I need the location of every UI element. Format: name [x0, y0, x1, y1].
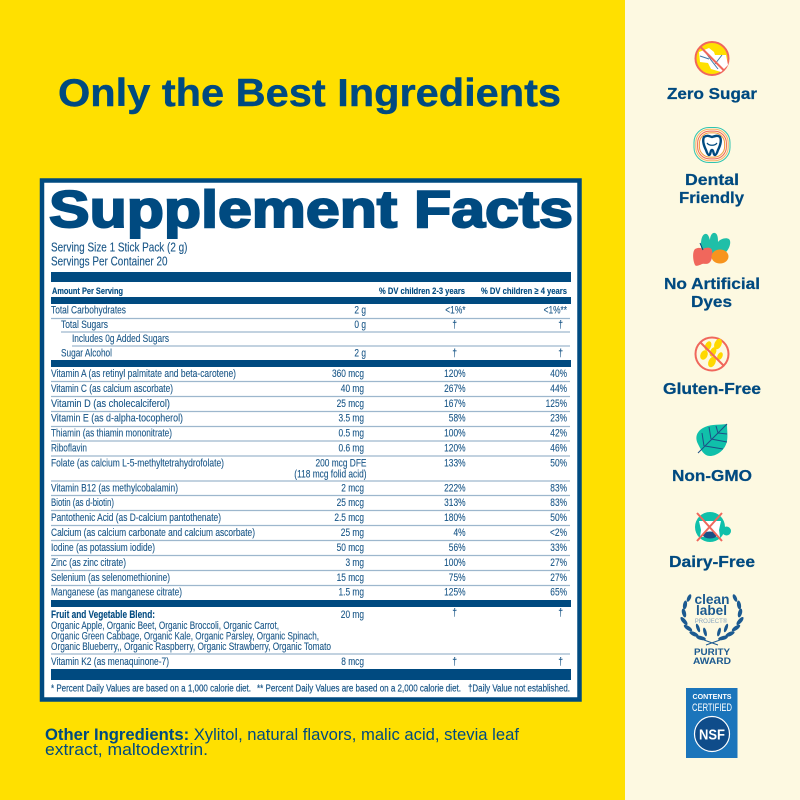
table header: % DV children 2-3 years — [379, 286, 465, 297]
row: Manganese: 125% — [444, 586, 466, 599]
benefit: Gluten-Free: Gluten-Free — [663, 381, 761, 398]
row: Vitamin C: 44% — [550, 383, 567, 395]
row: Folate: 200 mcg DFE — [315, 457, 367, 470]
row: Iodine — [51, 542, 567, 554]
row: Zinc: 100% — [444, 557, 466, 569]
serving information: Servings Per Container 20 — [51, 254, 168, 268]
benefit: Non-GMO: Non-GMO — [672, 468, 752, 485]
icon: crossed-out cow — [695, 512, 731, 542]
footnotes — [51, 684, 570, 694]
badge: Clean Label Project Purity Award: PURITY — [694, 647, 731, 658]
row: Riboflavin: 46% — [550, 442, 567, 455]
row: Riboflavin: 120% — [444, 442, 466, 455]
row: Biotin: 83% — [550, 497, 567, 509]
row: Vitamin B12 — [51, 482, 567, 495]
row: Pantothenic Acid — [51, 512, 567, 524]
row: Zinc: 3 mg — [345, 557, 364, 569]
row: Selenium: 75% — [449, 572, 466, 584]
benefit: Gluten-Free — [663, 338, 761, 398]
row: Manganese: Manganese (as manganese citrate) — [51, 586, 182, 598]
footnotes: * Percent Daily Values are based on a 1,000 calorie diet. — [51, 684, 251, 694]
row: Vitamin A: 360 mcg — [332, 368, 364, 380]
row: Vitamin C: 267% — [444, 383, 466, 395]
row: Vitamin K2 — [51, 656, 563, 668]
row: Includes 0g Added Sugars: Includes 0g Added Sugars — [72, 333, 169, 345]
row: Vitamin K2: † — [452, 656, 457, 668]
row: Pantothenic Acid: 50% — [550, 512, 567, 524]
row: Riboflavin: Riboflavin — [51, 442, 87, 454]
badge: NSF Contents Certified: CERTIFIED — [692, 702, 732, 714]
row: Vitamin C: 40 mg — [341, 383, 364, 395]
row: Vitamin K2: Vitamin K2 (as menaquinone-7) — [51, 656, 169, 668]
row: Manganese — [51, 586, 567, 599]
row: Vitamin E: 3.5 mg — [338, 412, 364, 425]
row: Fruit and Vegetable Blend: † — [452, 607, 457, 619]
benefit: Zero Sugar — [667, 42, 757, 103]
benefit: No Artificial Dyes: Dyes — [691, 294, 732, 311]
row: Folate: 133% — [444, 457, 466, 470]
row: Total Sugars: Total Sugars — [61, 319, 108, 331]
row: Vitamin K2: † — [558, 656, 563, 668]
panel: supplement facts — [42, 180, 580, 700]
row: Folate: 50% — [550, 457, 567, 470]
benefit: Dental Friendly: Friendly — [679, 190, 744, 207]
row: Calcium: Calcium (as calcium carbonate and calcium ascorbate) — [51, 527, 255, 539]
row: Selenium: Selenium (as selenomethionine) — [51, 572, 170, 584]
badge: NSF Contents Certified — [686, 688, 738, 758]
table header: % DV children ≥ 4 years — [481, 286, 567, 297]
row: Iodine: 33% — [550, 542, 567, 554]
row: Iodine: 56% — [449, 542, 466, 554]
row: Total Carbohydrates: Total Carbohydrates — [51, 304, 126, 316]
footnotes: †Daily Value not established. — [468, 684, 570, 694]
icon: crossed-out wheat — [696, 338, 728, 370]
icon: leaf — [696, 424, 727, 456]
row: Vitamin C: Vitamin C (as calcium ascorbate) — [51, 383, 173, 395]
benefit: Dairy-Free — [669, 512, 755, 571]
row: Vitamin B12: Vitamin B12 (as methylcobalamin) — [51, 482, 178, 494]
benefit: No Artificial Dyes: No Artificial — [664, 276, 760, 293]
row: Vitamin E: Vitamin E (as d-alpha-tocopherol) — [51, 412, 183, 424]
row: Fruit and Vegetable Blend: † — [558, 607, 563, 619]
row: Iodine: Iodine (as potassium iodide) — [51, 542, 155, 554]
row: Total Carbohydrates: 2 g — [354, 304, 366, 317]
row: Riboflavin — [51, 442, 567, 455]
badge: Clean Label Project Purity Award: PROJECT® — [695, 618, 728, 625]
row: Fruit and Vegetable Blend: Organic Apple, Organic Beet, Organic Broccoli, Organic Carrot, — [51, 620, 279, 632]
row: Vitamin D: Vitamin D (as cholecalciferol) — [51, 398, 170, 410]
serving information: Serving Size 1 Stick Pack (2 g) — [51, 240, 188, 254]
serving information — [51, 240, 188, 268]
row: Vitamin B12: 222% — [444, 482, 466, 495]
row: Vitamin E — [51, 412, 567, 425]
icon: smiling tooth — [694, 128, 730, 162]
row: Zinc — [51, 557, 567, 569]
row: Sugar Alcohol: † — [558, 347, 563, 360]
benefit: Dental Friendly: Dental — [685, 172, 739, 189]
footnotes: ** Percent Daily Values are based on a 2,000 calorie diet. — [257, 684, 461, 694]
row: Vitamin C — [51, 383, 567, 395]
row: Selenium: 15 mcg — [337, 572, 364, 584]
row: Zinc: Zinc (as zinc citrate) — [51, 557, 126, 569]
row: Fruit and Vegetable Blend: Organic Blueberry,, Organic Raspberry, Organic Strawberry, Organic Tomato — [51, 641, 331, 653]
table header: Amount Per Serving — [52, 286, 123, 297]
row: Folate — [51, 457, 567, 481]
row: Vitamin A: Vitamin A (as retinyl palmitate and beta-carotene) — [51, 368, 236, 380]
row: Vitamin E: 23% — [550, 412, 567, 425]
title: Only the Best Ingredients — [58, 72, 561, 115]
row: Iodine: 50 mcg — [337, 542, 364, 554]
row: Calcium: 25 mg — [341, 527, 364, 539]
row: Fruit and Vegetable Blend: Fruit and Vegetable Blend: — [51, 609, 155, 621]
badge: Clean Label Project Purity Award — [679, 592, 745, 667]
other ingredients text: extract, maltodextrin. — [45, 741, 208, 759]
benefit: Dental Friendly — [679, 128, 744, 207]
row: Vitamin A — [51, 368, 567, 380]
row: Selenium: 27% — [550, 572, 567, 584]
icon: laurel wreath — [679, 594, 745, 645]
row: Calcium: 4% — [453, 527, 466, 539]
icon: fruit and vegetables — [693, 233, 730, 266]
row: Biotin: Biotin (as d-biotin) — [51, 497, 114, 509]
row: Vitamin D: 25 mcg — [337, 398, 364, 410]
row: Sugar Alcohol — [61, 347, 563, 360]
row: Manganese: 65% — [550, 586, 567, 599]
row: Vitamin D: 125% — [546, 398, 567, 410]
row: Total Carbohydrates — [51, 304, 567, 317]
row: Pantothenic Acid: Pantothenic Acid (as D-calcium pantothenate) — [51, 512, 221, 524]
row: Sugar Alcohol: 2 g — [354, 347, 366, 360]
benefit: Zero Sugar: Zero Sugar — [667, 86, 757, 103]
row: Total Sugars: † — [558, 319, 563, 331]
row: Vitamin B12: 2 mcg — [341, 482, 364, 495]
row: Riboflavin: 0.6 mg — [338, 442, 364, 455]
badge: Clean Label Project Purity Award: AWARD — [693, 656, 731, 667]
row: Thiamin: 42% — [550, 427, 567, 440]
row: Vitamin D: 167% — [444, 398, 466, 410]
badge: NSF Contents Certified: NSF — [699, 726, 725, 744]
row: Fruit and Vegetable Blend — [51, 607, 563, 653]
benefit: Dairy-Free: Dairy-Free — [669, 554, 755, 571]
row: Total Carbohydrates: <1%** — [544, 304, 567, 317]
badge: NSF Contents Certified: CONTENTS — [692, 692, 732, 701]
benefit: No Artificial Dyes — [664, 233, 760, 311]
other ingredients text: Other Ingredients: Xylitol, natural flavors, malic acid, stevia leaf — [45, 726, 519, 744]
row: Folate: Folate (as calcium L-5-methyltetrahydrofolate) — [51, 458, 224, 470]
row: Total Sugars: † — [452, 319, 457, 331]
row: Thiamin — [51, 427, 567, 440]
row: Zinc: 27% — [550, 557, 567, 569]
row: Calcium — [51, 527, 567, 539]
panel: benefits sidebar background — [625, 0, 800, 800]
row: Total Sugars — [61, 319, 563, 331]
table header — [52, 286, 567, 297]
row: Total Sugars: 0 g — [354, 319, 366, 331]
row: Vitamin A: 120% — [444, 368, 466, 380]
badge: Clean Label Project Purity Award: label — [696, 603, 727, 618]
row: Sugar Alcohol: † — [452, 347, 457, 360]
heading: Supplement Facts: Supplement Facts — [49, 181, 573, 239]
row: Calcium: <2% — [550, 527, 567, 539]
row: Manganese: 1.5 mg — [338, 586, 364, 599]
row: Selenium — [51, 572, 567, 584]
row: Pantothenic Acid: 2.5 mcg — [334, 512, 364, 524]
row: Vitamin A: 40% — [550, 368, 567, 380]
row: Thiamin: Thiamin (as thiamin mononitrate) — [51, 428, 172, 440]
row: Thiamin: 0.5 mg — [338, 427, 364, 440]
row: Sugar Alcohol: Sugar Alcohol — [61, 348, 112, 360]
row: Biotin — [51, 497, 567, 509]
other ingredients text — [45, 726, 519, 759]
icon: crossed-out sugar cubes — [696, 42, 728, 75]
row: Pantothenic Acid: 180% — [444, 512, 466, 524]
benefit: Non-GMO — [672, 424, 752, 485]
row: Vitamin E: 58% — [449, 412, 466, 425]
row: Fruit and Vegetable Blend: 20 mg — [341, 609, 364, 621]
row: Folate: (118 mcg folid acid) — [294, 468, 366, 481]
badge: Clean Label Project Purity Award: clean — [694, 592, 730, 607]
row: Thiamin: 100% — [444, 427, 466, 440]
row: Fruit and Vegetable Blend: Organic Green Cabbage, Organic Kale, Organic Parsley, Organic Spinach, — [51, 630, 319, 642]
row: Total Carbohydrates: <1%* — [445, 304, 466, 317]
row: Biotin: 313% — [444, 497, 466, 509]
row: Vitamin K2: 8 mcg — [341, 656, 364, 668]
row: Vitamin B12: 83% — [550, 482, 567, 495]
row: Vitamin D — [51, 398, 567, 410]
row: Biotin: 25 mcg — [337, 497, 364, 509]
